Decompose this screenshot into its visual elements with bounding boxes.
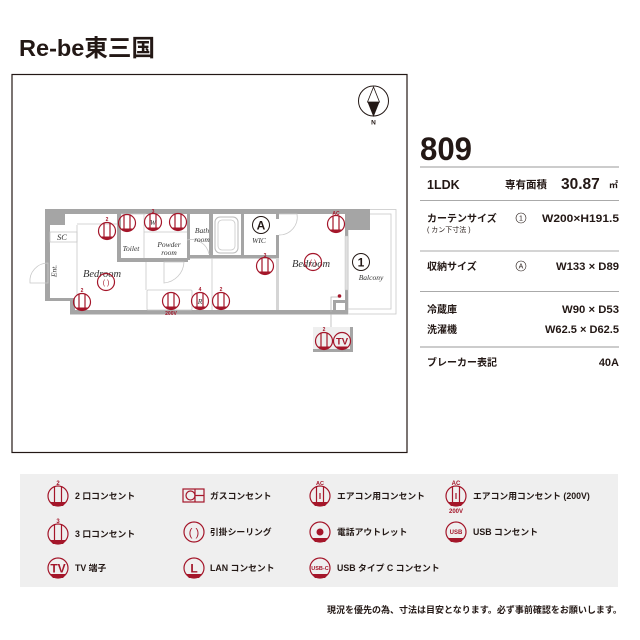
ceiling fixtures: ( ): [310, 260, 316, 267]
interior lines and doors: [30, 214, 339, 327]
floor area: 専有面積: [505, 178, 547, 191]
ceiling fixtures: [98, 254, 341, 298]
legend: USB outlet: USB コンセント: [473, 527, 538, 537]
legend: LAN outlet: LAN コンセント: [210, 563, 275, 573]
legend: AC outlet: [310, 481, 425, 506]
outlet symbols: 200V: [165, 311, 177, 317]
legend: AC outlet 200V: AC: [452, 481, 461, 487]
legend: AC outlet: AC: [316, 481, 324, 487]
breaker: [427, 356, 619, 369]
TV outlet box: 2: [323, 327, 326, 333]
layout type: 1LDK: [427, 178, 460, 192]
ceiling fixtures: ( ): [103, 280, 109, 287]
curtain size: 1: [519, 216, 523, 222]
curtain size: ( カン下寸法 ): [427, 225, 471, 234]
legend: LAN outlet: L: [190, 562, 198, 576]
legend: gas outlet: ガスコンセント: [210, 490, 272, 501]
legend: TV terminal: TV 端子: [75, 562, 106, 573]
outlet symbols: 2: [106, 217, 109, 223]
legend: AC outlet: エアコン用コンセント: [337, 491, 425, 501]
room labels: SC: [57, 232, 67, 242]
legend: 2-gang outlet: 2: [56, 481, 60, 487]
icon: north compass: N: [371, 120, 376, 126]
room labels: Toilet: [123, 244, 140, 253]
outlet symbols: AC: [332, 211, 340, 217]
legend: ceiling fixture: ( ): [189, 527, 199, 539]
outlet symbols: [74, 209, 344, 317]
room labels: Bath: [195, 226, 209, 235]
legend: TV terminal: TV: [50, 562, 66, 576]
floor plan: [30, 209, 396, 352]
storage size: 収納サイズ: [427, 260, 477, 273]
legend: 2-gang outlet: [48, 481, 135, 506]
legend: 3-gang outlet: 3 口コンセント: [75, 529, 135, 539]
legend: AC outlet 200V: エアコン用コンセント (200V): [473, 491, 590, 501]
panel: floor plan frame: [12, 74, 407, 452]
TV outlet box: TV: [336, 336, 349, 348]
curtain size: カーテンサイズ: [427, 212, 497, 225]
outlet symbols: 3: [152, 209, 155, 215]
appliance sizes: 洗濯機: [427, 323, 457, 336]
storage size: A: [519, 264, 524, 270]
outlet symbols: W: [150, 218, 157, 227]
storage marker A: [252, 216, 270, 234]
legend: AC outlet 200V: [446, 481, 590, 515]
balcony: Balcony: [359, 273, 384, 282]
legend: ceiling fixture: 引掛シーリング: [210, 526, 272, 537]
balcony: [348, 210, 396, 314]
legend: gas outlet: [183, 489, 272, 502]
floor area: ㎡: [609, 180, 618, 190]
outlet symbols: 3: [264, 253, 267, 259]
room labels: room: [161, 248, 177, 257]
appliance sizes: W62.5 × D62.5: [545, 324, 619, 336]
appliance sizes: [427, 303, 619, 336]
storage size: [427, 260, 619, 273]
room labels: room: [194, 235, 210, 244]
curtain size: W200×H191.5: [542, 213, 619, 225]
legend: USB-C outlet: [310, 558, 440, 578]
room labels: WIC: [252, 236, 267, 245]
specification table: [420, 166, 619, 369]
room labels: Powder: [156, 240, 181, 249]
curtain marker 1: [352, 254, 370, 270]
room labels: Bedroom: [292, 259, 330, 270]
legend: 3-gang outlet: [48, 519, 135, 544]
outlet symbols: 2: [81, 288, 84, 294]
outlet symbols: 4: [199, 287, 202, 293]
title: Re-be東三国: [19, 35, 155, 61]
floor area: 30.87: [561, 176, 600, 193]
TV outlet box: [313, 327, 353, 352]
storage size: W133 × D89: [556, 261, 619, 273]
room labels: Bedroom: [83, 269, 121, 280]
legend: 2-gang outlet: 2 口コンセント: [75, 491, 135, 501]
legend: USB outlet: USB: [450, 530, 463, 536]
room labels: Ent.: [50, 265, 58, 278]
legend: USB outlet: [446, 522, 538, 542]
legend: LAN outlet: [184, 558, 275, 578]
room labels: [50, 226, 330, 280]
legend: USB-C outlet: USB タイプ C コンセント: [337, 562, 440, 573]
curtain marker 1: 1: [358, 256, 365, 270]
outlet symbols: R: [197, 297, 203, 306]
floor area: [505, 176, 618, 193]
legend: telephone outlet: 電話アウトレット: [337, 526, 407, 537]
appliance sizes: 冷蔵庫: [427, 303, 457, 316]
legend: 3-gang outlet: 3: [56, 519, 60, 525]
legend: AC outlet 200V: 200V: [449, 509, 463, 515]
legend: ceiling fixture: [184, 522, 272, 542]
legend: telephone outlet: [310, 522, 407, 542]
unit number: 809: [420, 131, 472, 167]
outlet symbols: 2: [220, 287, 223, 293]
legend: USB-C outlet: USB-C: [311, 566, 329, 572]
footnote: 現況を優先の為、寸法は目安となります。必ず事前確認をお願いします。: [327, 604, 622, 615]
appliance sizes: W90 × D53: [562, 304, 619, 316]
walls: [45, 209, 370, 314]
legend: TV terminal: [48, 558, 106, 578]
storage marker A: A: [257, 218, 266, 232]
breaker: ブレーカー表記: [427, 356, 497, 369]
icon: north compass: [358, 86, 388, 126]
curtain size: [427, 212, 619, 234]
panel: legend: [20, 474, 618, 587]
breaker: 40A: [599, 357, 619, 369]
